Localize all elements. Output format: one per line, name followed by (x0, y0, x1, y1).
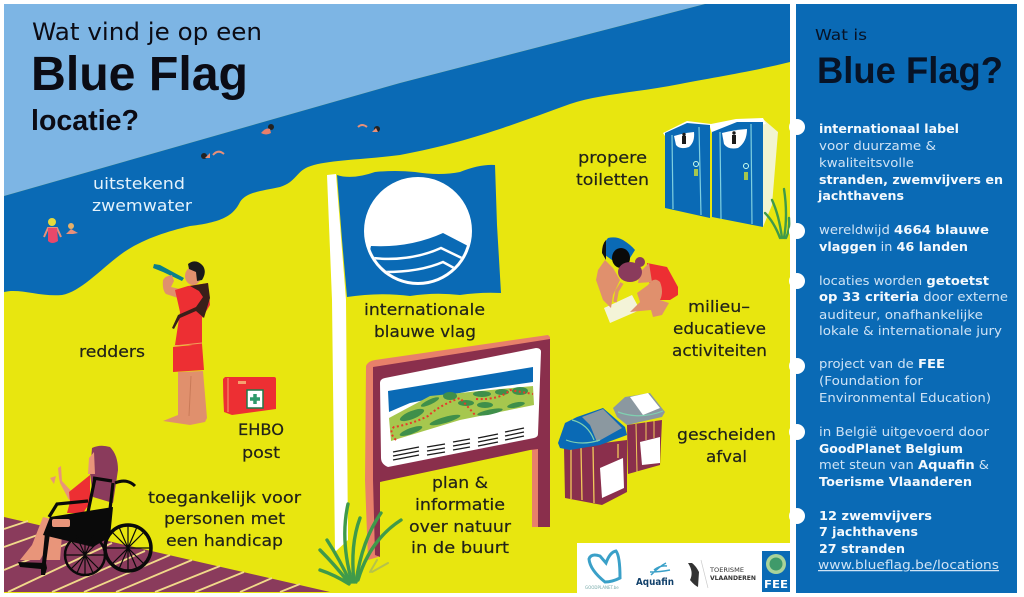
text: wereldwijd (819, 222, 989, 254)
logo: Toerisme Vlaanderen: TOERISME (709, 567, 744, 574)
label: uitstekend zwemwater: uitstekend (93, 174, 185, 193)
text: locations: www.blueflag.be/locations (818, 557, 999, 572)
icon: lifeguard (153, 261, 210, 425)
label: EHBO post: EHBO (238, 420, 284, 439)
icon: toilets (663, 118, 778, 227)
text: criteria (819, 273, 1008, 338)
icon: GoodPlanet heart (585, 551, 620, 590)
label: internationale blauwe vlag: blauwe vlag (374, 322, 476, 341)
text: criteria: locaties worden getoetst (819, 273, 989, 288)
label: gescheiden afval (677, 425, 776, 466)
icon: person in wheelchair (18, 446, 151, 575)
label: plan en informatie (409, 473, 511, 557)
label: propere toiletten (576, 148, 649, 189)
text: FEE: Environmental Education) (819, 390, 991, 405)
label: milieu-educatieve activiteiten: milieu– (688, 297, 750, 316)
logo: Aquafin: Aquafin (636, 577, 674, 588)
text: international label: jachthavens (817, 188, 904, 203)
title: Wat vind je op een Blue Flag locatie: Blue Flag (31, 48, 248, 101)
label: milieu-educatieve activiteiten: educatieve (673, 319, 766, 338)
text: FEE: (Foundation for (819, 373, 924, 388)
icon: flag pole (327, 174, 348, 552)
label: propere toiletten: toiletten (576, 170, 649, 189)
label: toegankelijk voor personen met een handicap: een handicap (166, 531, 283, 550)
logo: Toerisme Vlaanderen (688, 560, 756, 588)
heading: Wat is Blue Flag: Wat is (815, 26, 867, 44)
text: Belgie: Toerisme Vlaanderen (819, 474, 972, 489)
text: Belgie: met steun van Aquafin & (819, 457, 989, 472)
label: toegankelijk voor personen met een handicap: toegankelijk voor (148, 488, 301, 507)
heading: Wat is Blue Flag: Blue Flag? (817, 50, 1003, 91)
label: plan en informatie: plan & (432, 473, 488, 492)
text: Belgie (819, 424, 990, 489)
title: Wat vind je op een Blue Flag locatie: locatie? (31, 105, 139, 137)
label: plan en informatie: informatie (415, 495, 505, 514)
label: gescheiden afval: gescheiden (677, 425, 776, 444)
text: locations: 7 jachthavens (819, 524, 918, 539)
icon: children studying (596, 237, 678, 323)
text: Belgie: in België uitgevoerd door (819, 424, 990, 439)
deck (4, 517, 330, 592)
text: wereldwijd: vlaggen in 46 landen (819, 239, 968, 254)
label: uitstekend zwemwater: zwemwater (92, 196, 192, 215)
logo: Toerisme Vlaanderen: VLAANDEREN (710, 575, 756, 582)
text: criteria: op 33 criteria door externe (819, 289, 1008, 304)
text: international label: kwaliteitsvolle (819, 155, 914, 170)
sea (4, 4, 790, 295)
text: FEE: project van de FEE (819, 356, 945, 371)
sky (4, 4, 705, 196)
bullets (789, 119, 805, 524)
text: criteria: auditeur, onafhankelijke (819, 307, 983, 322)
label: propere toiletten: propere (578, 148, 647, 167)
text: locations (818, 508, 999, 572)
icon: grass (320, 504, 401, 584)
label: EHBO post (238, 420, 284, 462)
text: locations: 12 zwemvijvers (819, 508, 932, 523)
label: toegankelijk voor personen met een handicap: personen met (164, 509, 285, 528)
label: milieu-educatieve activiteiten (672, 297, 767, 360)
icon: waste bins (558, 393, 665, 505)
panel: logos (577, 543, 790, 593)
label: milieu-educatieve activiteiten: activiteiten (672, 341, 767, 360)
icon: GoodPlanet heart: GOODPLANET.be (585, 585, 619, 590)
text: international label (817, 121, 1003, 203)
title: Wat vind je op een Blue Flag locatie: Wat vind je op een (32, 18, 262, 46)
label: internationale blauwe vlag (364, 300, 485, 341)
label: EHBO post: post (242, 443, 280, 462)
text: wereldwijd: wereldwijd 4664 blauwe (819, 222, 989, 237)
icon: swimmers (44, 124, 380, 243)
text: Belgie: GoodPlanet Belgium (819, 441, 963, 456)
label: plan en informatie: over natuur (409, 517, 511, 536)
text: FEE (819, 356, 991, 405)
logo: FEE (762, 551, 790, 592)
label: toegankelijk voor personen met een handicap (148, 488, 301, 550)
logo: Aquafin (636, 563, 674, 588)
text: criteria: lokale & internationale jury (819, 323, 1003, 338)
text: international label: voor duurzame & (819, 138, 936, 153)
heading: Wat is Blue Flag (815, 26, 1003, 91)
label: gescheiden afval: afval (706, 447, 747, 466)
icon: blue flag (337, 165, 501, 297)
text: locations: 27 stranden (819, 541, 905, 556)
icon: first aid kit (223, 377, 276, 415)
label: internationale blauwe vlag: internationale (364, 300, 485, 319)
panel: Wat is Blue Flag (789, 4, 1017, 593)
icon: grass by toilets (765, 189, 789, 238)
label: redders: redders (79, 342, 145, 361)
panel: beach scene (4, 4, 790, 593)
text: international label: stranden, zwemvijvers en (819, 172, 1003, 187)
label: plan en informatie: in de buurt (411, 538, 509, 557)
icon: information sign with map (365, 335, 550, 560)
text: international label: internationaal label (819, 121, 959, 136)
logo: FEE: FEE (764, 578, 788, 591)
title: Wat vind je op een Blue Flag locatie (31, 18, 262, 137)
label: uitstekend zwemwater (92, 174, 192, 215)
